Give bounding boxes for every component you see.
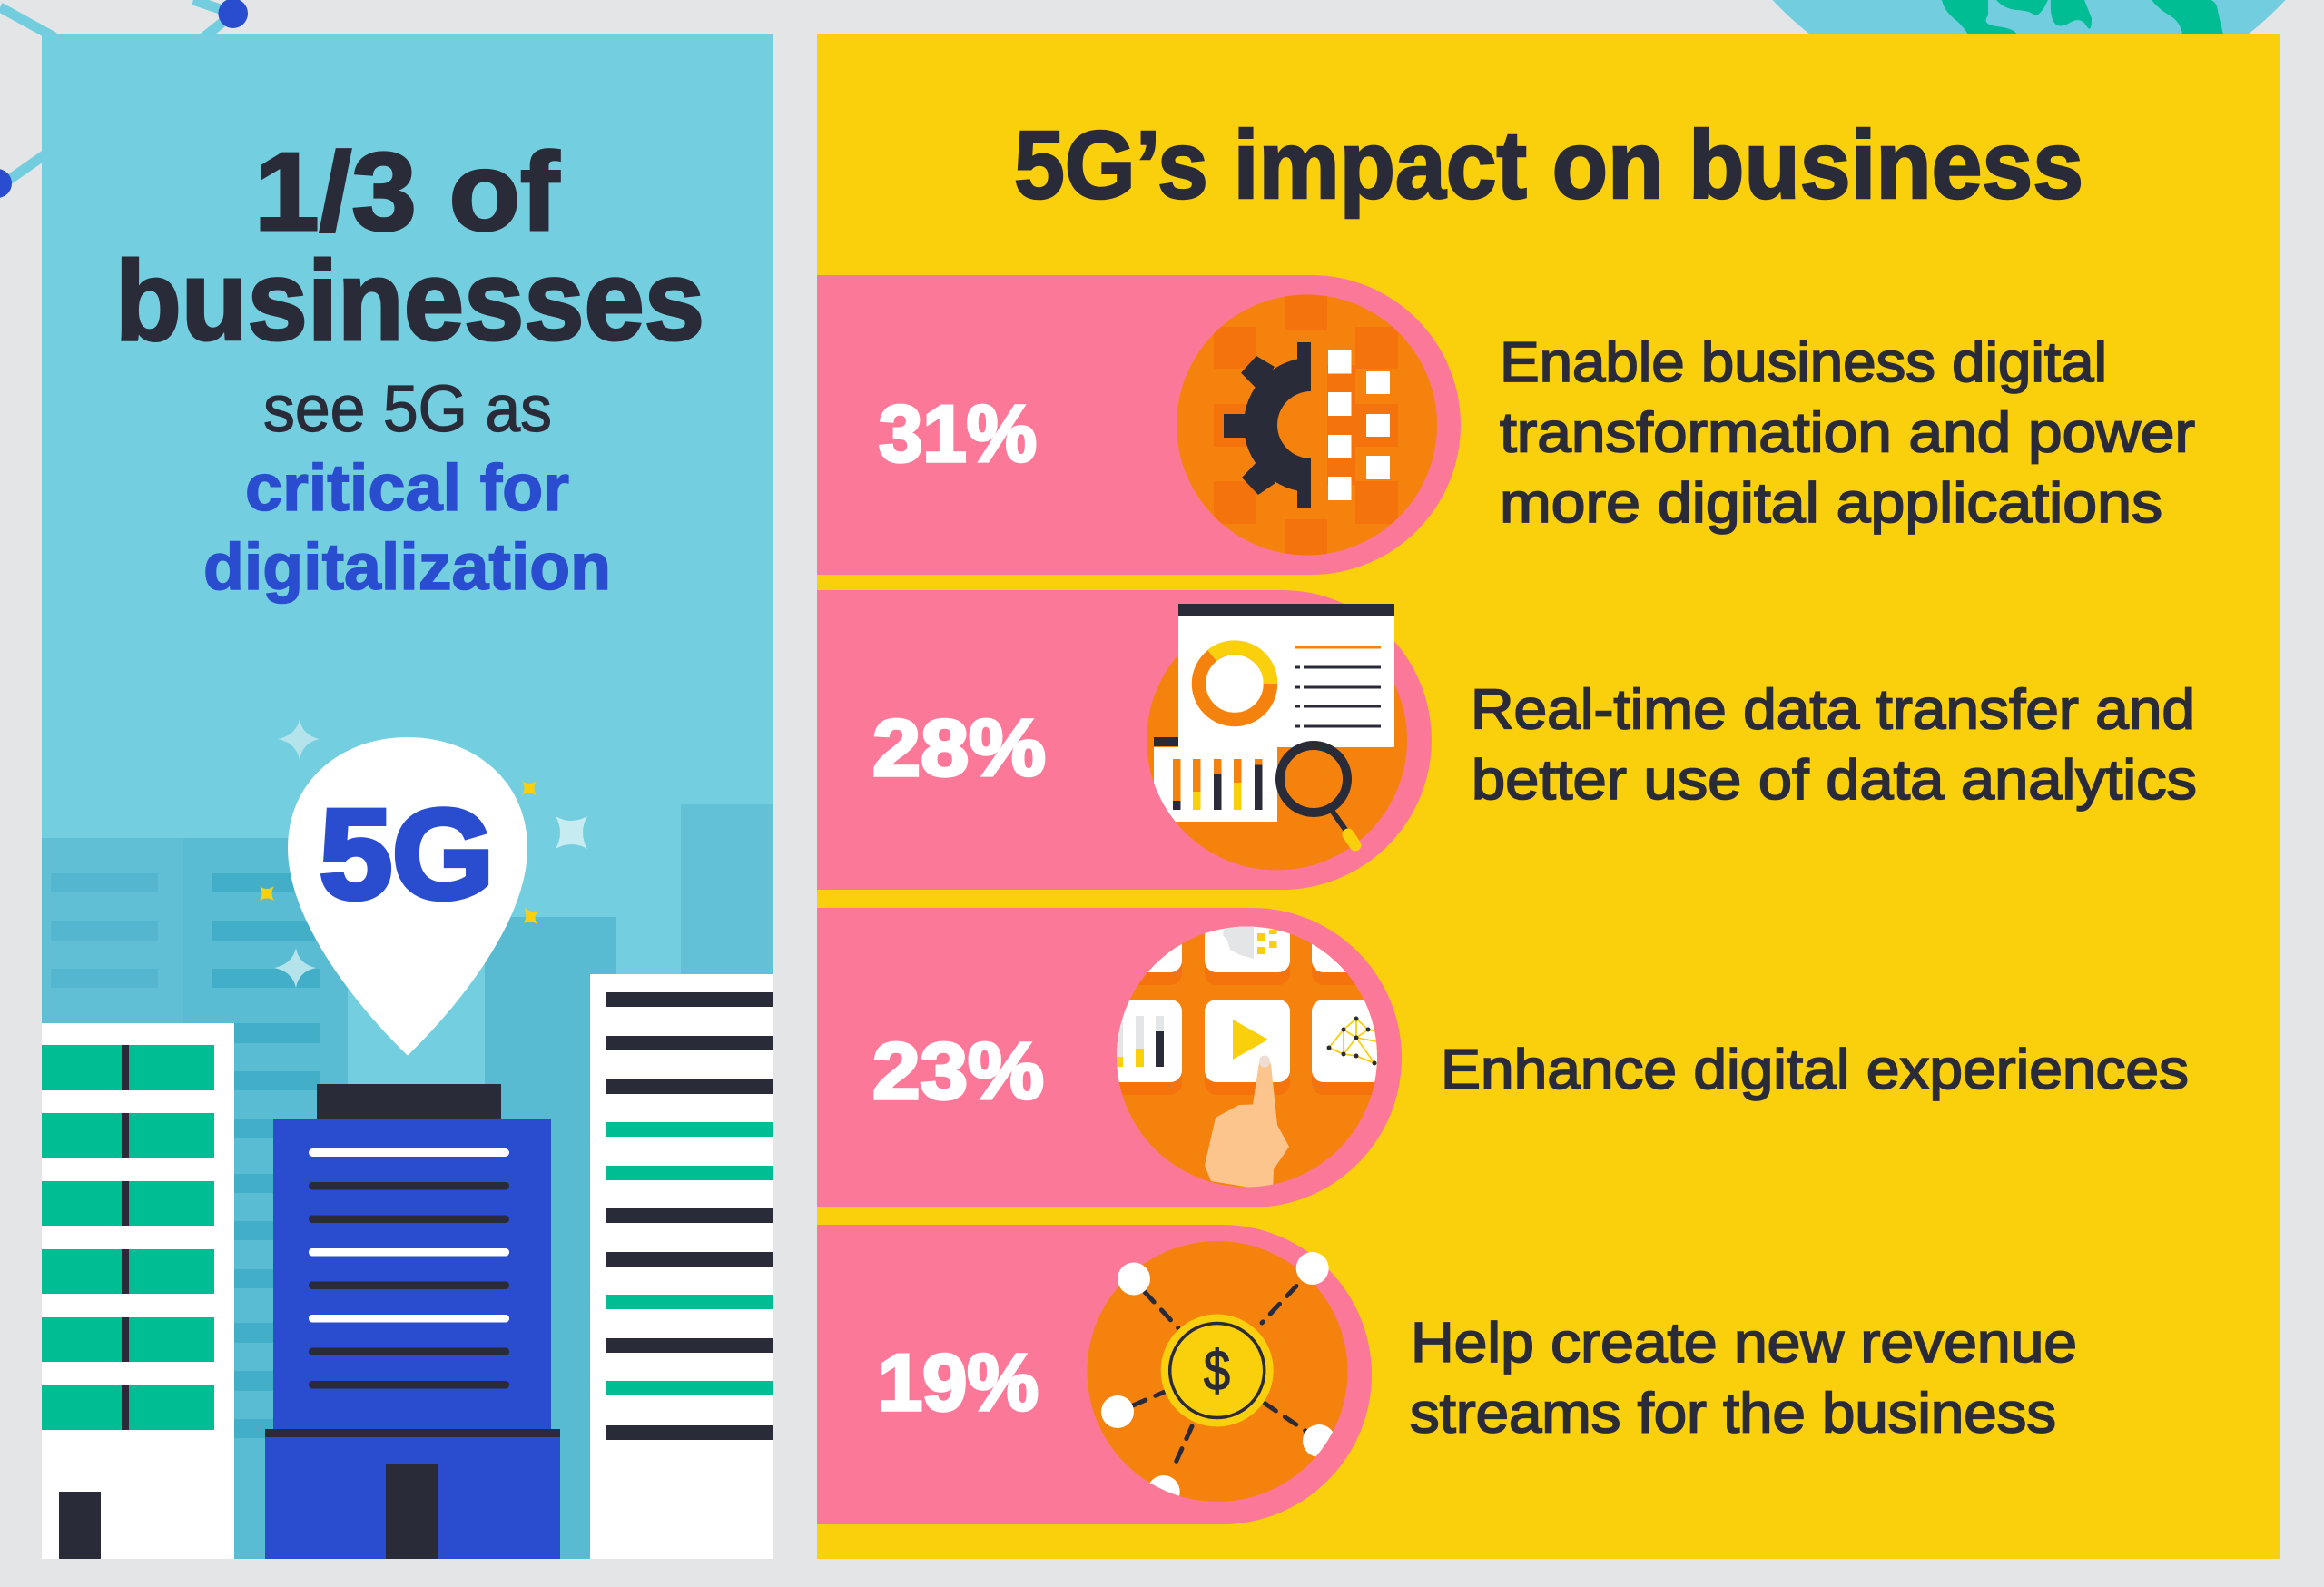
heading: 1/3 of businesses	[115, 130, 704, 364]
text: see 5G as critical for digitalization: critical for	[245, 452, 569, 525]
text: see 5G as critical for digitalization	[203, 373, 611, 604]
background network decoration	[0, 0, 248, 198]
illustration: right white building	[590, 974, 773, 1559]
illustration: central blue tower	[265, 1084, 560, 1559]
text: digital transformation: Enable business digital	[1500, 331, 2107, 394]
icon: 5G location pin	[288, 737, 527, 1055]
row: 31% digital transformation	[817, 275, 2195, 575]
icon: dollar coin network	[1088, 1241, 1347, 1508]
row: 28% data analytics	[817, 590, 2197, 890]
heading: 1/3 of businesses: 1/3 of	[254, 130, 559, 253]
stat: 28%: 28%	[872, 703, 1046, 793]
icon: app tiles and pointing hand	[1117, 926, 1377, 1188]
stat: 31%: 31%	[879, 389, 1037, 478]
row: 23% digital experiences	[817, 890, 2189, 1208]
stat: 23%: 23%	[872, 1026, 1044, 1116]
icon: analytics dashboard and magnifier	[1147, 604, 1407, 870]
text: revenue streams: streams for the business	[1410, 1382, 2056, 1445]
text: revenue streams	[1410, 1312, 2077, 1445]
text: data analytics: Real-time data transfer and	[1471, 679, 2195, 741]
globe decoration	[1677, 0, 2324, 111]
illustration: background skyline	[42, 804, 773, 1559]
text: digital transformation	[1500, 331, 2195, 535]
text: digital transformation: transformation and power	[1500, 401, 2195, 465]
panel: left 1/3 of businesses	[42, 34, 773, 1559]
heading: 5G's impact on business: 5G’s impact on business	[1014, 112, 2083, 219]
heading: 1/3 of businesses: businesses	[115, 239, 704, 364]
text: data analytics	[1471, 679, 2197, 812]
icon: sparkles	[260, 719, 587, 988]
icon: dollar coin network: $	[1204, 1340, 1230, 1403]
illustration: left white building	[42, 1023, 234, 1559]
panel: right 5G's impact on business	[817, 34, 2280, 1559]
text: see 5G as critical for digitalization: digitalization	[203, 531, 611, 604]
text: see 5G as critical for digitalization: see 5G as	[263, 373, 552, 446]
stat: 19%: 19%	[878, 1337, 1039, 1427]
text: data analytics: better use of data analytics	[1472, 749, 2197, 812]
text: digital experiences: Enhance digital experiences	[1441, 1039, 2189, 1101]
icon: 5G location pin: 5G	[320, 783, 494, 925]
icon: gear and digital squares	[1177, 291, 1437, 559]
text: revenue streams: Help create new revenue	[1411, 1312, 2077, 1375]
row: 19% revenue streams	[817, 1225, 2077, 1524]
text: digital transformation: more digital applications	[1500, 472, 2162, 535]
